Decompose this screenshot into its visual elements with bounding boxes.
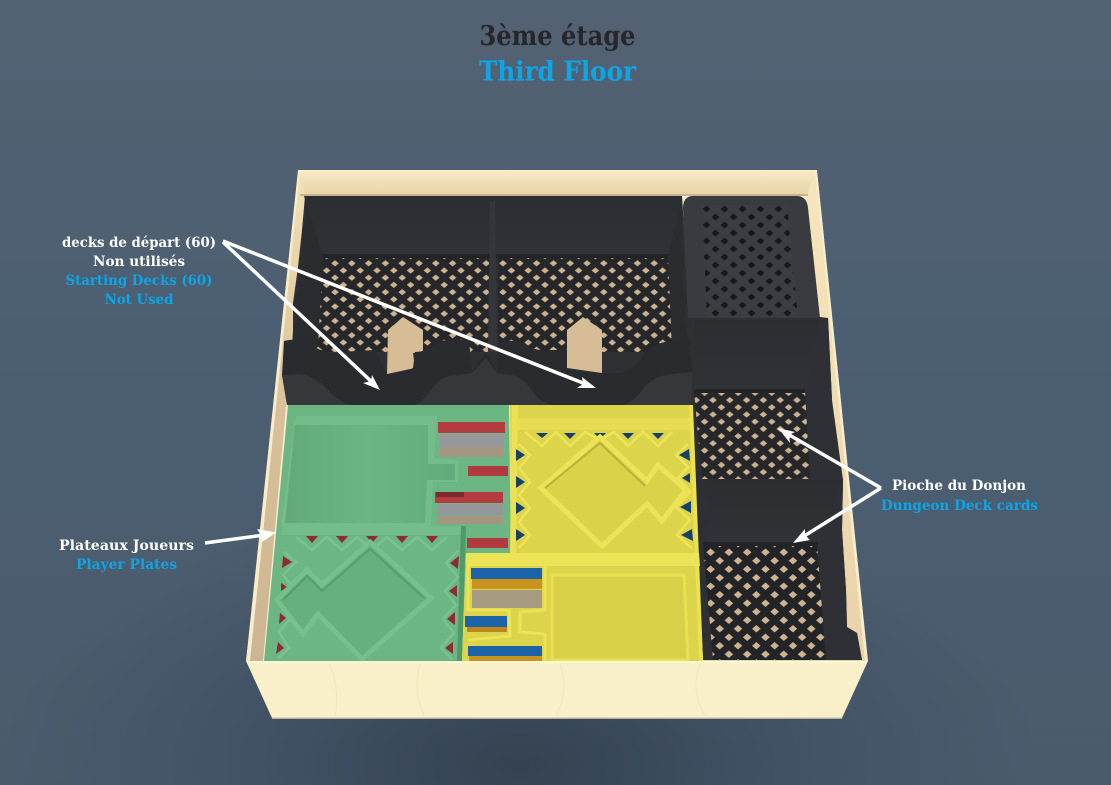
center divider bbox=[488, 201, 497, 352]
arrow to right deck tray bbox=[223, 241, 596, 388]
zigzag rims bbox=[278, 537, 459, 659]
box front face bbox=[246, 661, 868, 718]
lower plate card slots bbox=[465, 568, 542, 661]
arrow to plates bbox=[205, 529, 276, 543]
label: starting decks: decks de départ (60) bbox=[62, 235, 216, 251]
notch right bbox=[567, 317, 602, 373]
upper mesh bbox=[694, 391, 810, 479]
title bbox=[479, 21, 637, 88]
arrow to upper dungeon mesh bbox=[778, 428, 881, 488]
red notches bbox=[276, 536, 459, 654]
lower plate band bbox=[466, 553, 700, 566]
right top mesh tray bbox=[683, 196, 820, 318]
raised diamond bbox=[541, 437, 686, 546]
dark insert base bbox=[288, 196, 862, 660]
label: dungeon deck bbox=[881, 478, 1038, 514]
box walls bbox=[246, 170, 868, 661]
label: dungeon deck: Dungeon Deck cards bbox=[881, 498, 1038, 514]
zigzag rims bbox=[519, 432, 692, 548]
right wavy side wall bbox=[668, 197, 692, 345]
arrow to lower dungeon mesh bbox=[793, 488, 881, 543]
right compartments bbox=[693, 318, 862, 660]
left back compartments bbox=[293, 196, 692, 352]
callout: dungeon deck bbox=[778, 428, 1038, 543]
tray front lips bbox=[282, 358, 693, 405]
front card trays bbox=[282, 340, 693, 405]
mesh floor right bbox=[498, 256, 672, 352]
label: player plates: Plateaux Joueurs bbox=[59, 538, 194, 554]
title: 3ème étage bbox=[480, 21, 636, 52]
callout: player plates bbox=[59, 529, 276, 573]
upper plate recess bbox=[281, 416, 458, 526]
upper plate card slots bbox=[435, 422, 508, 548]
notch left bbox=[387, 317, 423, 374]
yellow player plates bbox=[462, 405, 703, 661]
label: player plates bbox=[59, 538, 194, 573]
lower mesh bbox=[703, 544, 826, 660]
label: starting decks: Non utilisés bbox=[93, 254, 185, 270]
divider wall bbox=[705, 480, 842, 544]
back wall bbox=[304, 196, 682, 256]
arrow to left deck tray bbox=[223, 242, 380, 390]
blue notches bbox=[516, 433, 693, 541]
label: starting decks: Starting Decks (60) bbox=[66, 273, 212, 289]
mesh floor left bbox=[316, 256, 489, 352]
left wavy side wall bbox=[293, 197, 323, 345]
label: starting decks bbox=[62, 235, 216, 308]
upper wall bbox=[695, 320, 820, 391]
label: starting decks: Not Used bbox=[104, 292, 174, 308]
green player plates bbox=[264, 405, 511, 661]
lower plate recess bbox=[552, 575, 688, 660]
raised diamond bbox=[277, 542, 431, 659]
storage box bbox=[246, 170, 868, 718]
label: player plates: Player Plates bbox=[76, 557, 177, 573]
callout: starting decks bbox=[62, 235, 596, 390]
title: Third Floor bbox=[479, 56, 637, 88]
label: dungeon deck: Pioche du Donjon bbox=[892, 478, 1026, 494]
